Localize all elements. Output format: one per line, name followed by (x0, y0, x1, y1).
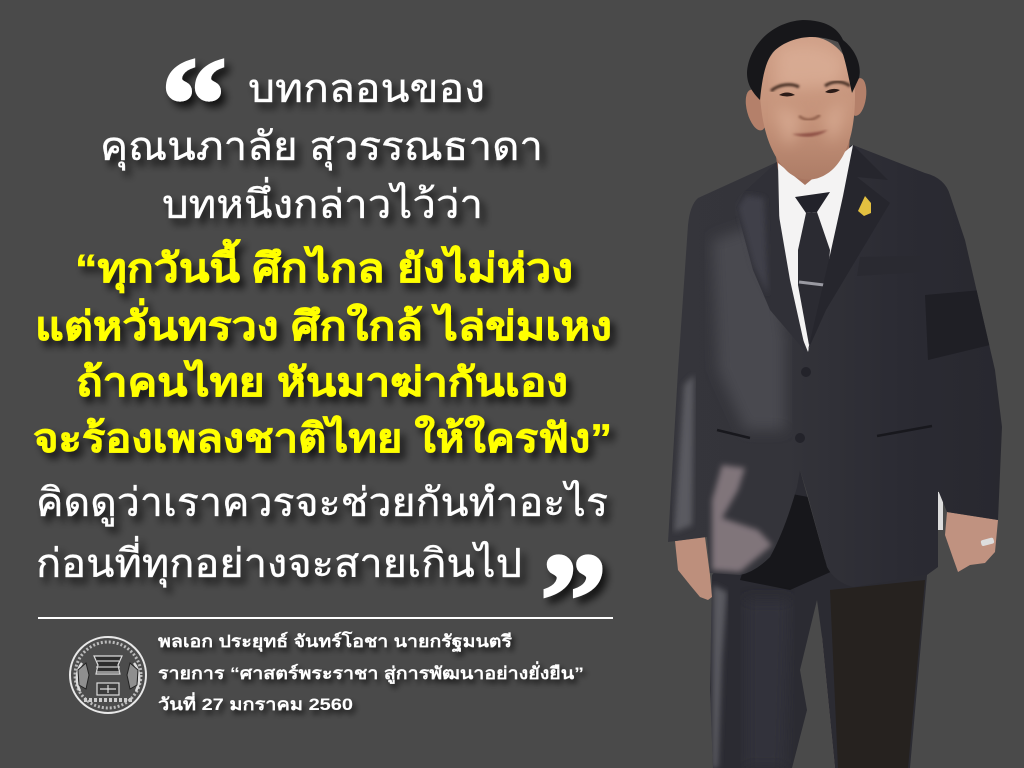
highlighted poem in yellow: ถ้าคนไทย หันมาฆ่ากันเอง (76, 359, 568, 405)
attribution text: วันที่ 27 มกราคม 2560 (158, 692, 353, 714)
lapel pin (858, 196, 871, 216)
attribution text (158, 631, 584, 714)
left lapel (736, 162, 806, 352)
portrait: man in dark suit walking (668, 20, 1002, 768)
jacket (668, 145, 1002, 587)
divider rule (38, 617, 613, 619)
open quotation mark: “ (161, 30, 227, 177)
jacket highlights (712, 220, 785, 430)
quote intro text: บทหนึ่งกล่าวไว้ว่า (162, 177, 483, 227)
neck (772, 130, 850, 192)
eyes and brows (771, 82, 850, 91)
closing question text: คิดดูว่าเราควรจะช่วยกันทำอะไร (36, 480, 608, 526)
highlighted poem in yellow: “ทุกวันนี้ ศึกไกล ยังไม่ห่วง (75, 239, 573, 294)
mouth (792, 130, 828, 137)
trousers (710, 470, 927, 768)
right hand (945, 512, 998, 572)
quote intro text (100, 67, 543, 227)
quote intro text: คุณนภาลัย สุวรรณธาดา (100, 125, 543, 171)
hair (747, 20, 860, 100)
icon: government seal (70, 637, 146, 713)
shirt and collar (778, 145, 853, 352)
highlighted poem in yellow: แต่หวั่นทรวง ศึกใกล้ ไล่ข่มเหง (35, 298, 612, 349)
highlighted poem in yellow: จะร้องเพลงชาติไทย ให้ใครฟัง” (33, 415, 612, 461)
closing question text (36, 480, 608, 588)
shirt cuff (937, 492, 943, 530)
left ear (742, 87, 770, 133)
close quotation mark: ” (540, 526, 607, 674)
attribution text: รายการ “ศาสตร์พระราชา สู่การพัฒนาอย่างยั่งยืน” (158, 661, 584, 685)
necktie (795, 192, 830, 345)
right ear (847, 77, 869, 117)
right lapel (808, 145, 890, 350)
left hand (675, 537, 712, 600)
closing question text: ก่อนที่ทุกอย่างจะสายเกินไป (36, 536, 522, 588)
highlighted poem in yellow (33, 239, 612, 461)
ring (980, 537, 995, 546)
nose (799, 115, 820, 120)
face (760, 36, 855, 180)
attribution text: พลเอก ประยุทธ์ จันทร์โอชา นายกรัฐมนตรี (158, 631, 513, 653)
quote intro text: บทกลอนของ (248, 67, 485, 111)
